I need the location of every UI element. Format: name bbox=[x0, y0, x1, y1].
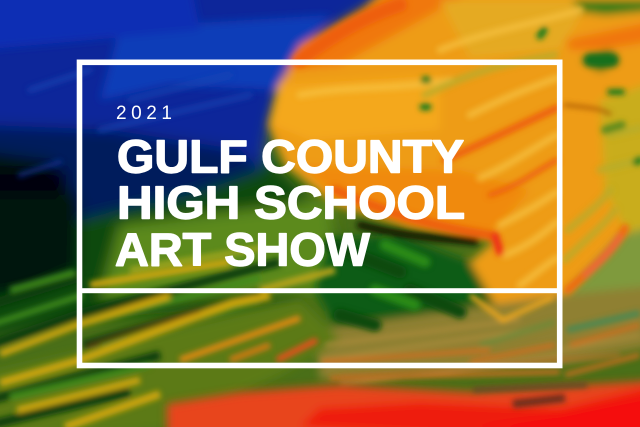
title bbox=[115, 130, 465, 275]
frame: outer border bbox=[80, 62, 560, 366]
title line 2: HIGH SCHOOL bbox=[117, 176, 465, 228]
year label: 2021 bbox=[116, 103, 172, 124]
frame: divider line bbox=[77, 288, 562, 293]
title line 1: GULF COUNTY bbox=[117, 130, 464, 182]
title line 3: ART SHOW bbox=[115, 223, 370, 275]
white outline frame bbox=[77, 62, 562, 366]
